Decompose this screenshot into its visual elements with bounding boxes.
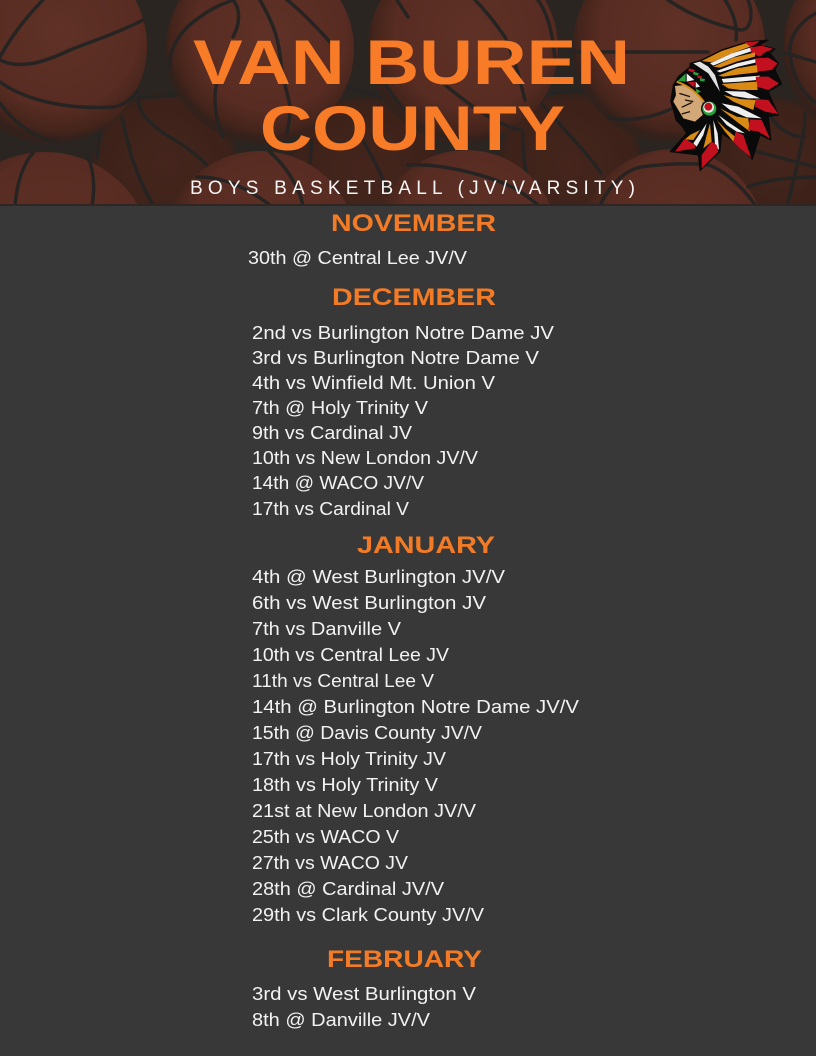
January schedule: 27th vs WACO JV	[252, 852, 409, 873]
November schedule: 30th @ Central Lee JV/V	[248, 247, 468, 268]
heading: January: JANUARY	[357, 532, 495, 559]
facial lines	[679, 93, 693, 114]
lower feathers	[675, 91, 778, 168]
January schedule: 6th vs West Burlington JV	[252, 592, 487, 613]
January schedule: 7th vs Danville V	[252, 618, 402, 639]
February schedule: 8th @ Danville JV/V	[252, 1009, 431, 1030]
header basketball photo	[0, 0, 816, 206]
headband	[677, 82, 705, 103]
December schedule: 17th vs Cardinal V	[252, 498, 410, 519]
face	[673, 85, 703, 122]
December schedule: 14th @ WACO JV/V	[252, 472, 425, 493]
January schedule: 21st at New London JV/V	[252, 800, 477, 821]
February schedule: 3rd vs West Burlington V	[252, 983, 477, 1004]
heading: December: DECEMBER	[332, 284, 496, 311]
January schedule	[252, 566, 580, 925]
December schedule: 9th vs Cardinal JV	[252, 422, 413, 443]
January schedule: 4th @ West Burlington JV/V	[252, 566, 506, 587]
heading: February: FEBRUARY	[327, 946, 482, 973]
upper feathers	[702, 41, 779, 90]
January schedule: 25th vs WACO V	[252, 826, 400, 847]
January schedule: 29th vs Clark County JV/V	[252, 904, 485, 925]
January schedule: 10th vs Central Lee JV	[252, 644, 450, 665]
December schedule: 7th @ Holy Trinity V	[252, 397, 429, 418]
January schedule: 14th @ Burlington Notre Dame JV/V	[252, 696, 580, 717]
February schedule	[252, 983, 477, 1030]
December schedule: 2nd vs Burlington Notre Dame JV	[252, 322, 555, 343]
ear ornament	[701, 100, 718, 117]
heading: November: NOVEMBER	[331, 210, 496, 237]
title: VAN BUREN	[193, 28, 630, 98]
January schedule: 17th vs Holy Trinity JV	[252, 748, 447, 769]
January schedule: 18th vs Holy Trinity V	[252, 774, 439, 795]
subtitle: BOYS BASKETBALL (JV/VARSITY)	[190, 178, 635, 199]
January schedule: 15th @ Davis County JV/V	[252, 722, 483, 743]
December schedule: 10th vs New London JV/V	[252, 447, 479, 468]
December schedule: 4th vs Winfield Mt. Union V	[252, 372, 496, 393]
title: COUNTY	[260, 94, 565, 164]
icon: chief mascot logo	[670, 40, 782, 171]
December schedule	[252, 322, 555, 519]
January schedule: 11th vs Central Lee V	[252, 670, 435, 691]
January schedule: 28th @ Cardinal JV/V	[252, 878, 445, 899]
title	[193, 28, 630, 164]
December schedule: 3rd vs Burlington Notre Dame V	[252, 347, 540, 368]
